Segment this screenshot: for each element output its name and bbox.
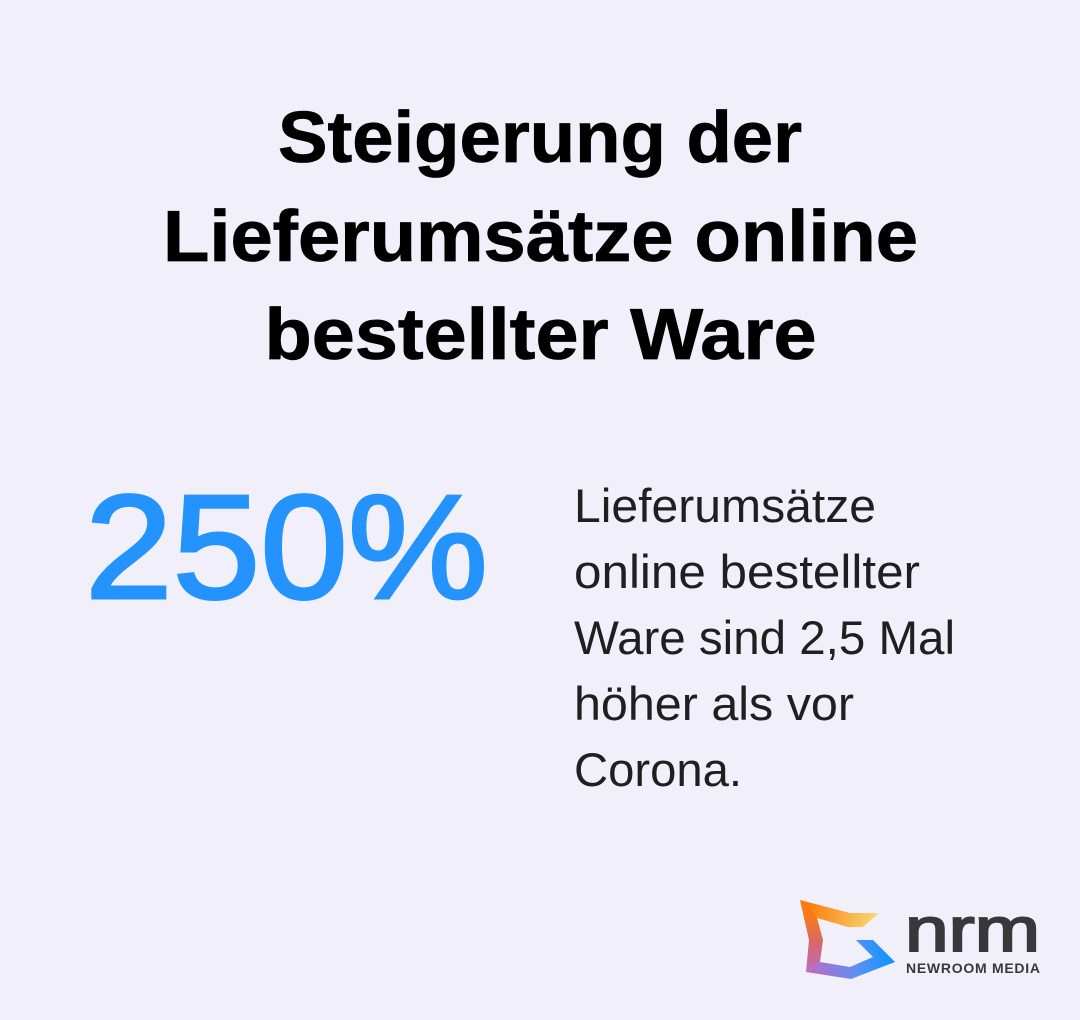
description text: höher als vor — [574, 677, 854, 730]
title: Lieferumsätze online — [163, 197, 918, 277]
big number: 250%: 250% — [85, 465, 488, 630]
description text: online bestellter — [574, 545, 920, 598]
logo wordmark: nrm — [905, 896, 1040, 965]
logo: newroom media — [800, 896, 1040, 979]
description text: Corona. — [574, 743, 742, 796]
title — [163, 98, 918, 375]
logo mark — [800, 900, 895, 979]
description text — [574, 479, 955, 796]
description text: Lieferumsätze — [574, 479, 876, 532]
logo tagline: NEWROOM MEDIA — [906, 960, 1040, 976]
title: bestellter Ware — [264, 295, 816, 375]
description text: Ware sind 2,5 Mal — [574, 611, 955, 664]
title: Steigerung der — [278, 98, 802, 178]
